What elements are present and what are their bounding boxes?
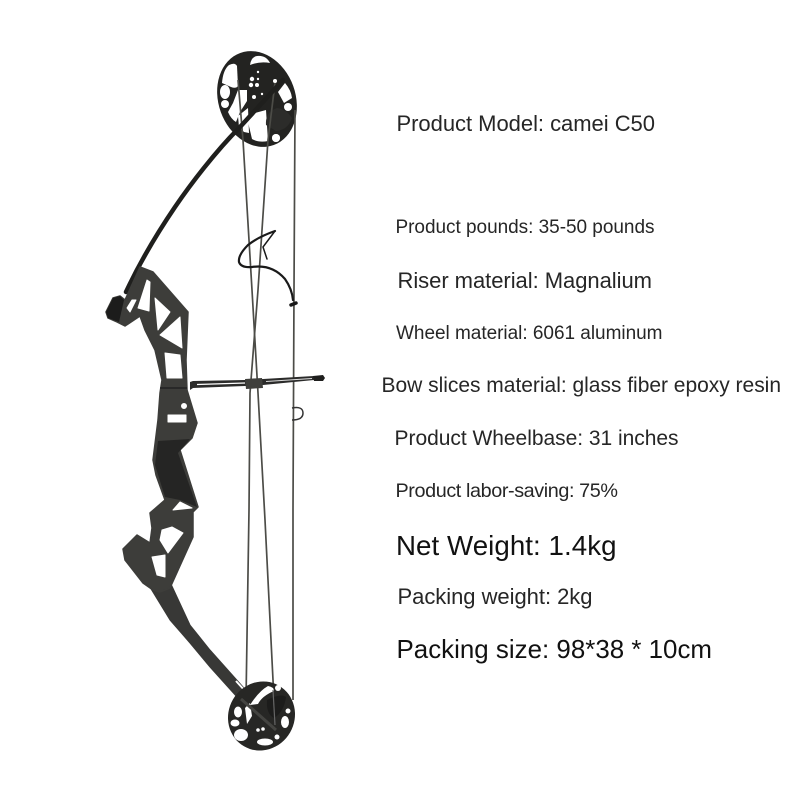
spec: riser material: Riser material: Magnalium [398,268,652,293]
D-loop release cable [239,231,296,305]
spec: packing size: Packing size: 98*38 * 10cm [396,636,712,664]
upper limb [126,80,283,292]
string nock loop [292,408,303,420]
spec: wheel material: Wheel material: 6061 aluminum [396,323,662,344]
compound bow illustration [106,40,325,763]
spec: packing weight: Packing weight: 2kg [398,584,592,609]
spec: product wheelbase: Product Wheelbase: 31 inches [394,427,678,450]
rubber grip [155,439,197,507]
arrow rest bar [190,375,325,390]
lower limb [148,584,280,732]
spec: bow slices material: Bow slices material: glass fiber epoxy resin [382,374,781,397]
spec: product model: Product Model: camei C50 [396,111,655,136]
riser cut-outs [127,280,192,577]
bottom cam wheel [215,669,308,763]
spec: product pounds: Product pounds: 35-50 pounds [396,217,654,238]
limb pocket and sight block [106,296,124,322]
riser [106,267,198,592]
top cam wheel [204,40,310,158]
specification list [382,111,781,664]
spec: labor saving: Product labor-saving: 75% [396,480,618,502]
spec: net weight: Net Weight: 1.4kg [396,530,616,561]
bow strings and cables [238,80,295,700]
